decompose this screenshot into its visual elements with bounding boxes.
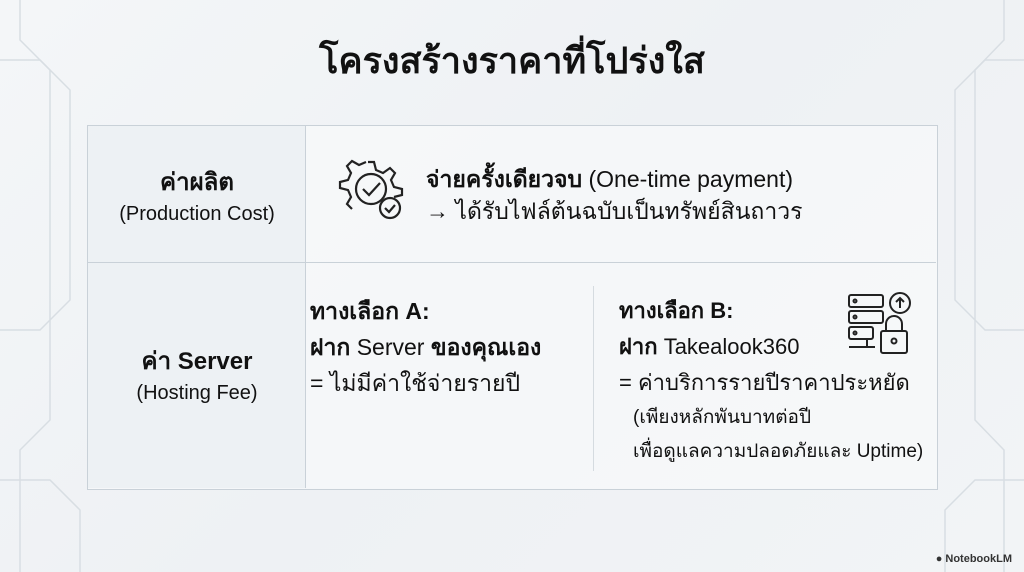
option B: = ค่าบริการรายปีราคาประหยัด	[619, 370, 910, 395]
row label: server: (Hosting Fee)	[136, 382, 258, 404]
text: one-time payment	[426, 162, 803, 224]
row label: production cost: ค่าผลิต	[160, 169, 234, 196]
option B: ทางเลือก B:	[619, 298, 733, 323]
option A: ทางเลือก A:	[310, 298, 430, 324]
row label: server: ค่า Server	[142, 348, 252, 375]
text: one-time payment: จ่ายครั้งเดียวจบ (One-time payment)	[426, 166, 793, 192]
row label: production cost	[119, 169, 275, 225]
inner divider	[593, 286, 594, 471]
text: one-time payment: → ได้รับไฟล์ต้นฉบับเป็นทรัพย์สินถาวร	[426, 198, 803, 224]
option B: ฝาก Takealook360	[619, 334, 799, 359]
option A: = ไม่มีค่าใช้จ่ายรายปี	[310, 370, 520, 396]
row label: production cost: (Production Cost)	[119, 203, 275, 225]
option B	[619, 298, 910, 395]
option A: ฝาก Server ของคุณเอง	[310, 334, 541, 360]
table	[87, 125, 938, 490]
table: (เพียงหลักพันบาทต่อปี	[633, 407, 811, 428]
icon: server lock	[848, 292, 911, 354]
row label: server	[136, 348, 258, 404]
icon: gear check	[338, 160, 404, 220]
brand mark: ● NotebookLM	[936, 553, 1012, 565]
table: เพื่อดูแลความปลอดภัยและ Uptime)	[633, 441, 923, 462]
title: โครงสร้างราคาที่โปร่งใส	[319, 40, 705, 81]
left header column	[88, 126, 306, 488]
option A	[310, 298, 541, 396]
